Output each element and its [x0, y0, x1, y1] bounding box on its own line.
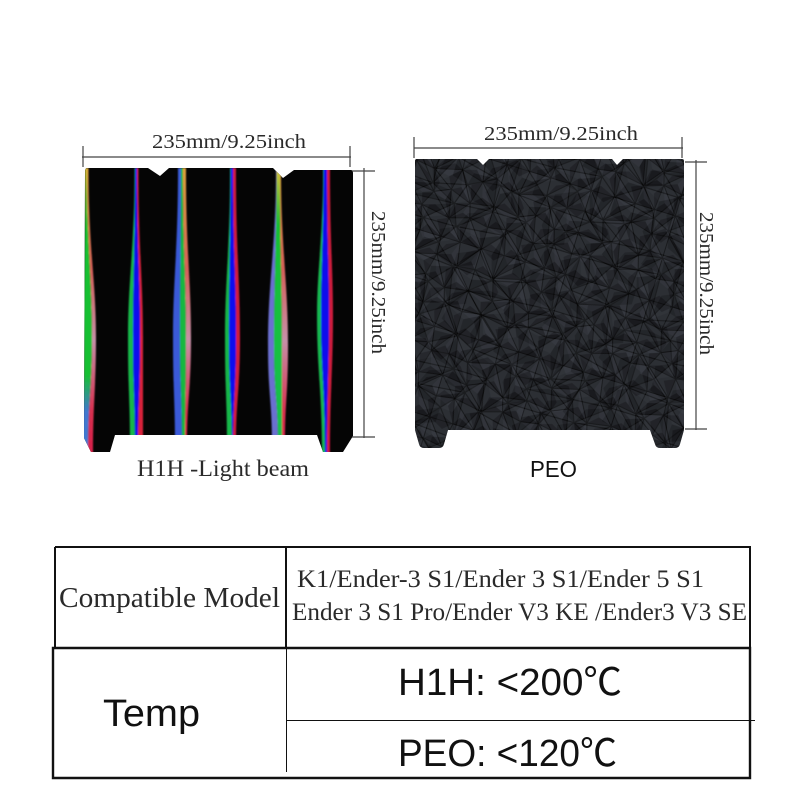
width label: 235mm/9.25inch	[152, 131, 306, 153]
H1H caption: H1H -Light beam	[137, 456, 309, 481]
compatible model label: Compatible Model	[59, 583, 280, 614]
width label: 235mm/9.25inch	[484, 123, 638, 145]
compatible models line 2: Ender 3 S1 Pro/Ender V3 KE /Ender3 V3 SE	[292, 599, 747, 626]
compatible models line 1: K1/Ender-3 S1/Ender 3 S1/Ender 5 S1	[297, 566, 704, 593]
H1H temperature: H1H: <200℃	[398, 662, 622, 704]
table lines	[53, 547, 755, 778]
height dimension arrow	[685, 160, 707, 430]
height label: 235mm/9.25inch	[367, 211, 389, 354]
panel: H1H light beam plate	[82, 131, 389, 481]
light beams	[83, 168, 333, 455]
table: compatibility and temperature	[53, 547, 755, 778]
height label: 235mm/9.25inch	[695, 212, 717, 355]
height dimension arrow	[352, 168, 375, 438]
PEO plate second texture layer	[415, 159, 684, 448]
H1H plate body	[84, 168, 353, 452]
PEO plate surface	[415, 159, 684, 448]
width dimension arrow	[82, 146, 351, 167]
PEO temperature: PEO: <120℃	[398, 733, 617, 775]
temp label: Temp	[103, 693, 200, 735]
PEO caption: PEO	[530, 456, 577, 482]
width dimension arrow	[414, 137, 683, 158]
panel: PEO plate	[414, 123, 717, 482]
